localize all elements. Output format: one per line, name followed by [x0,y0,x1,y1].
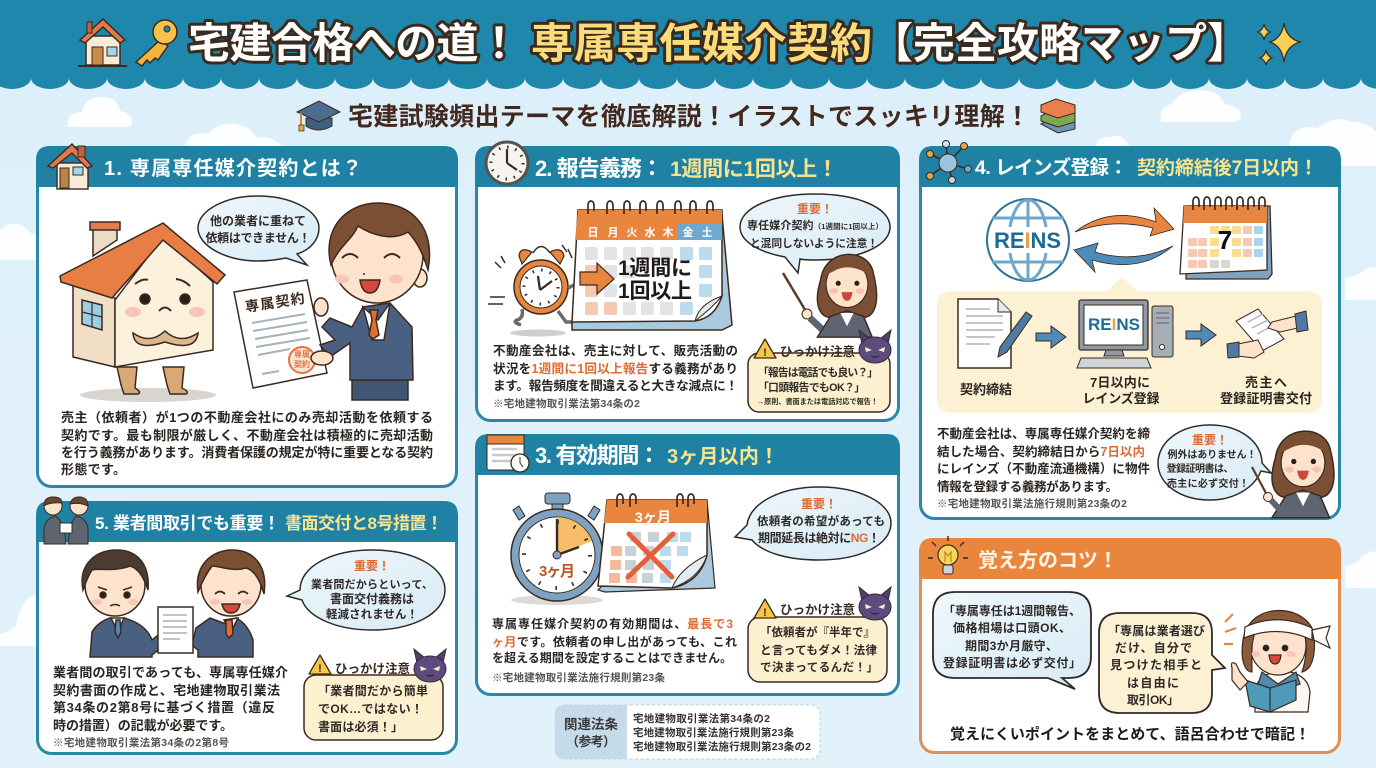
memory tip bubble 1: 価格相場は口頭OK、 [953,620,1071,635]
speech bubble: important: 依頼者の希望があっても [757,514,885,528]
heading: 4. レインズ登録： [975,156,1128,179]
icon: light bulb [928,536,968,574]
subtitle text: 宅建試験頻出テーマを徹底解説！イラストでスッキリ理解！ [348,103,1030,131]
title text [188,20,1249,67]
body text: ※宅地建物取引業法第34条の2第8号 [53,736,229,749]
icon: key [136,20,177,66]
subtitle row [297,99,1075,133]
speech bubble: important: 重要！ [797,201,833,216]
body text: 契約です。最も制限が厳しく、不動産会社は積極的に売却活動 [61,428,433,443]
body text: 業者間の取引であっても、専属専任媒介 [53,665,288,680]
memory tip bubble 2 [1099,613,1225,713]
heading [535,156,838,181]
icon: house [78,19,127,67]
arrow [1186,324,1216,346]
caution box: ひっかけ注意 [335,661,410,676]
step labels [960,375,1312,406]
arrow [1036,326,1066,348]
body text: 結した場合、契約締結日から7日以内 [937,444,1145,459]
heading: 3ヶ月以内！ [667,445,779,468]
panel 1: 専属専任媒介契約とは [36,144,458,486]
icon: network [926,140,972,184]
caution box [304,649,446,740]
calendar [572,201,732,330]
caution box: ひっかけ注意 [780,602,855,617]
panel frame [475,434,900,694]
related laws box [555,705,820,759]
speech bubble: important: 期間延長は絶対にNG！ [758,530,880,545]
heading: 覚え方のコツ！ [978,549,1118,572]
memory tip bubble 2: 見つけた相手と [1110,657,1202,672]
panel 3: 有効期間 [475,434,900,694]
caution box [748,587,891,682]
calendar: 土 [702,225,712,239]
step labels: 売主へ [1245,375,1287,390]
speech bubble: important: 重要！ [801,496,837,511]
caution box: 「報告は電話でも良い？」 [758,366,878,379]
speech bubble: important: 業者間だからといって、 [311,577,433,591]
icon: books [1041,99,1075,133]
title text: 【完全攻略マップ】 [871,20,1249,67]
teacher character [783,254,877,337]
icon: clock [486,142,528,184]
memory tip bubble 2: は自由に [1127,675,1179,690]
heading: 契約締結後7日以内！ [1137,157,1318,179]
speech bubble [198,196,319,265]
background clouds [0,90,1376,646]
body text [492,616,737,684]
title text: 専属専任媒介契約 [531,20,872,67]
stopwatch: 3ヶ月 [539,563,575,580]
teacher character [1252,431,1334,518]
speech bubble: important: 専任媒介契約（1週間に1回以上） [747,218,883,232]
speech bubble: important: 登録証明書は、 [1166,462,1234,475]
speech bubble: important: 例外はありません！ [1168,448,1256,461]
icon: sparkles [1258,23,1300,65]
body text: 状況を1週間に1回以上報告する義務があり [493,361,738,376]
caution box: →原則、書面または電話対応で報告！ [757,397,878,406]
law list: 宅地建物取引業法第34条の2 [633,712,770,725]
panel frame [919,538,1341,752]
house character illustration [60,222,225,402]
panel 2: 報告義務 [475,142,900,420]
speech bubble: important [740,194,890,273]
calendar: 木 [662,225,674,239]
body text: 専属専任媒介契約の有効期間は、最長で3 [492,616,733,631]
caution box: 「依頼者が『半年で』 [760,625,875,639]
calendar with 7: 7 [1218,225,1232,255]
calendar: 1週間に [618,257,692,280]
body text: ※宅地建物取引業法施行規則第23条 [492,671,666,684]
speech bubble: important: 売主に必ず交付！ [1167,477,1249,490]
body text: を超える期間を設定することはできません。 [492,650,732,665]
calendar: 日 [588,226,598,239]
contract document: 契約 [294,359,310,369]
body text: ヶ月です。依頼者の申し出があっても、これ [492,634,737,649]
body text: ます。報告頻度を間違えると大きな減点に！ [493,378,738,393]
box label: 関連法条 [564,716,618,732]
calendar with 7 [1180,197,1272,279]
step: certificate handover [1227,309,1308,358]
cycle arrows [1074,208,1174,272]
box label [564,716,618,749]
alarm clock character [488,245,576,336]
heading: 1. 専属専任媒介契約とは？ [104,157,362,180]
heading: 3. 有効期間： [535,443,660,468]
speech bubble: important: と混同しないように注意！ [750,237,878,250]
law list: 宅地建物取引業法施行規則第23条 [633,726,794,739]
heading: 書面交付と8号措置！ [285,513,443,533]
body text: 形態です。 [61,462,126,477]
speech bubble: important [287,550,445,630]
memory tip bubble 2: 取引OK」 [1127,693,1179,707]
caution box: 「口頭報告でもOK？」 [758,381,865,394]
speech bubble: important: 書面交付義務は [330,591,414,606]
step labels: 登録証明書交付 [1220,391,1312,406]
body text: 情報を登録する義務があります。 [937,479,1118,494]
panel 6: 覚え方のコツ [919,536,1341,752]
body text: 不動産会社は、専属専任媒介契約を締 [937,426,1150,441]
calendar with red cross [598,494,715,592]
caution box: ! [763,607,767,619]
panel frame [475,146,900,420]
icon: two people [44,497,88,544]
contract document: 専属 [294,349,310,359]
calendar with red cross: 3ヶ月 [635,509,671,525]
step labels: 契約締結 [960,382,1012,397]
caution box: 書面は必須！」 [318,719,403,734]
calendar: 1回以上 [618,280,692,303]
caution box: ひっかけ注意 [780,344,855,359]
calendar: 水 [644,225,656,239]
heading [95,513,443,533]
step: REINS computer: REINS [1088,315,1140,334]
icon: calendar with clock [487,435,529,472]
caution box [748,330,891,412]
body text: 第34条の2第8号に基づく措置（違反 [53,700,275,715]
step labels: レインズ登録 [1082,391,1160,406]
panel frame [36,501,458,754]
caution box: と言ってもダメ！法律 [760,643,878,657]
caution box: で決まってるんだ！」 [760,660,878,674]
speech bubble: 他の業者に重ねて [210,213,306,228]
law list [633,712,811,753]
stopwatch [511,493,603,605]
REINS globe [987,199,1069,281]
body text: 売主（依頼者）が1つの不動産会社にのみ売却活動を依頼する [61,410,433,425]
step labels: 7日以内に [1090,375,1150,390]
speech bubble: important [1158,425,1271,500]
body text: 時の措置）の記載が必要です。 [53,718,233,733]
contract document [234,280,327,388]
memory tip bubble 1: 期間3か月厳守、 [965,638,1058,653]
body text: を行う義務があります。消費者保護の規定が特に重要となる契約 [61,445,433,460]
panel frame [36,146,458,486]
icon: house [48,144,92,189]
memory tip bubble 2: 「専属は業者選び [1108,623,1205,638]
contract document: 専属契約 [244,290,306,315]
heading: 1週間に1回以上！ [670,158,838,181]
body text: 契約書面の作成と、宅地建物取引業法 [53,683,280,698]
process flow panel [937,277,1322,413]
caution box: ! [318,663,322,675]
heading [535,443,779,468]
student character [1224,610,1330,712]
icon: graduation cap [297,101,340,131]
law list: 宅地建物取引業法施行規則第23条の2 [633,740,811,753]
caution box: でOK…ではない！ [318,702,423,716]
caution box: ! [763,347,767,359]
caution box: 「業者間だから簡単 [318,683,428,698]
memory tip bubble 1: 登録証明書は必ず交付」 [943,655,1081,670]
speech bubble: important: 重要！ [354,558,390,573]
panel 4: レインズ登録 [919,140,1341,518]
body text [61,410,433,477]
panel 5: 業者間取引 [36,497,458,754]
speech bubble: important [735,487,891,560]
calendar: 金 [682,225,694,239]
speech bubble: important: 軽減されません！ [326,607,418,621]
REINS globe: REINS [994,228,1061,253]
title text: 宅建合格への道！ [188,20,520,67]
panel frame [919,146,1341,518]
heading: 2. 報告義務： [535,156,663,181]
calendar: 月 [608,226,618,239]
speech bubble: important: 重要！ [1192,432,1228,447]
memory tip bubble 1: 「専属専任は1週間報告、 [943,603,1081,618]
body text: ※宅地建物取引業法施行規則第23条の2 [937,497,1127,510]
summary line: 覚えにくいポイントをまとめて、語呂合わせで暗記！ [950,725,1310,743]
body text [53,665,288,749]
step: contract document [958,299,1032,368]
body text: にレインズ（不動産流通機構）に物件 [937,461,1150,476]
heading: 5. 業者間取引でも重要！ [95,514,280,533]
calendar: 火 [626,226,638,239]
body text: ※宅地建物取引業法第34条の2 [493,397,640,410]
title banner [0,0,1376,90]
speech bubble: 依頼はできません！ [206,230,310,245]
memory tip bubble 2: だけ、自分で [1115,640,1192,655]
two agents exchanging document [82,550,265,657]
body text [937,426,1150,510]
box label: （参考） [566,734,616,749]
body text [493,343,738,410]
step: REINS computer [1077,300,1173,368]
body text: 不動産会社は、売主に対して、販売活動の [493,343,738,358]
memory tip bubble 1 [933,592,1091,689]
heading [975,156,1318,179]
agent character [311,203,430,400]
